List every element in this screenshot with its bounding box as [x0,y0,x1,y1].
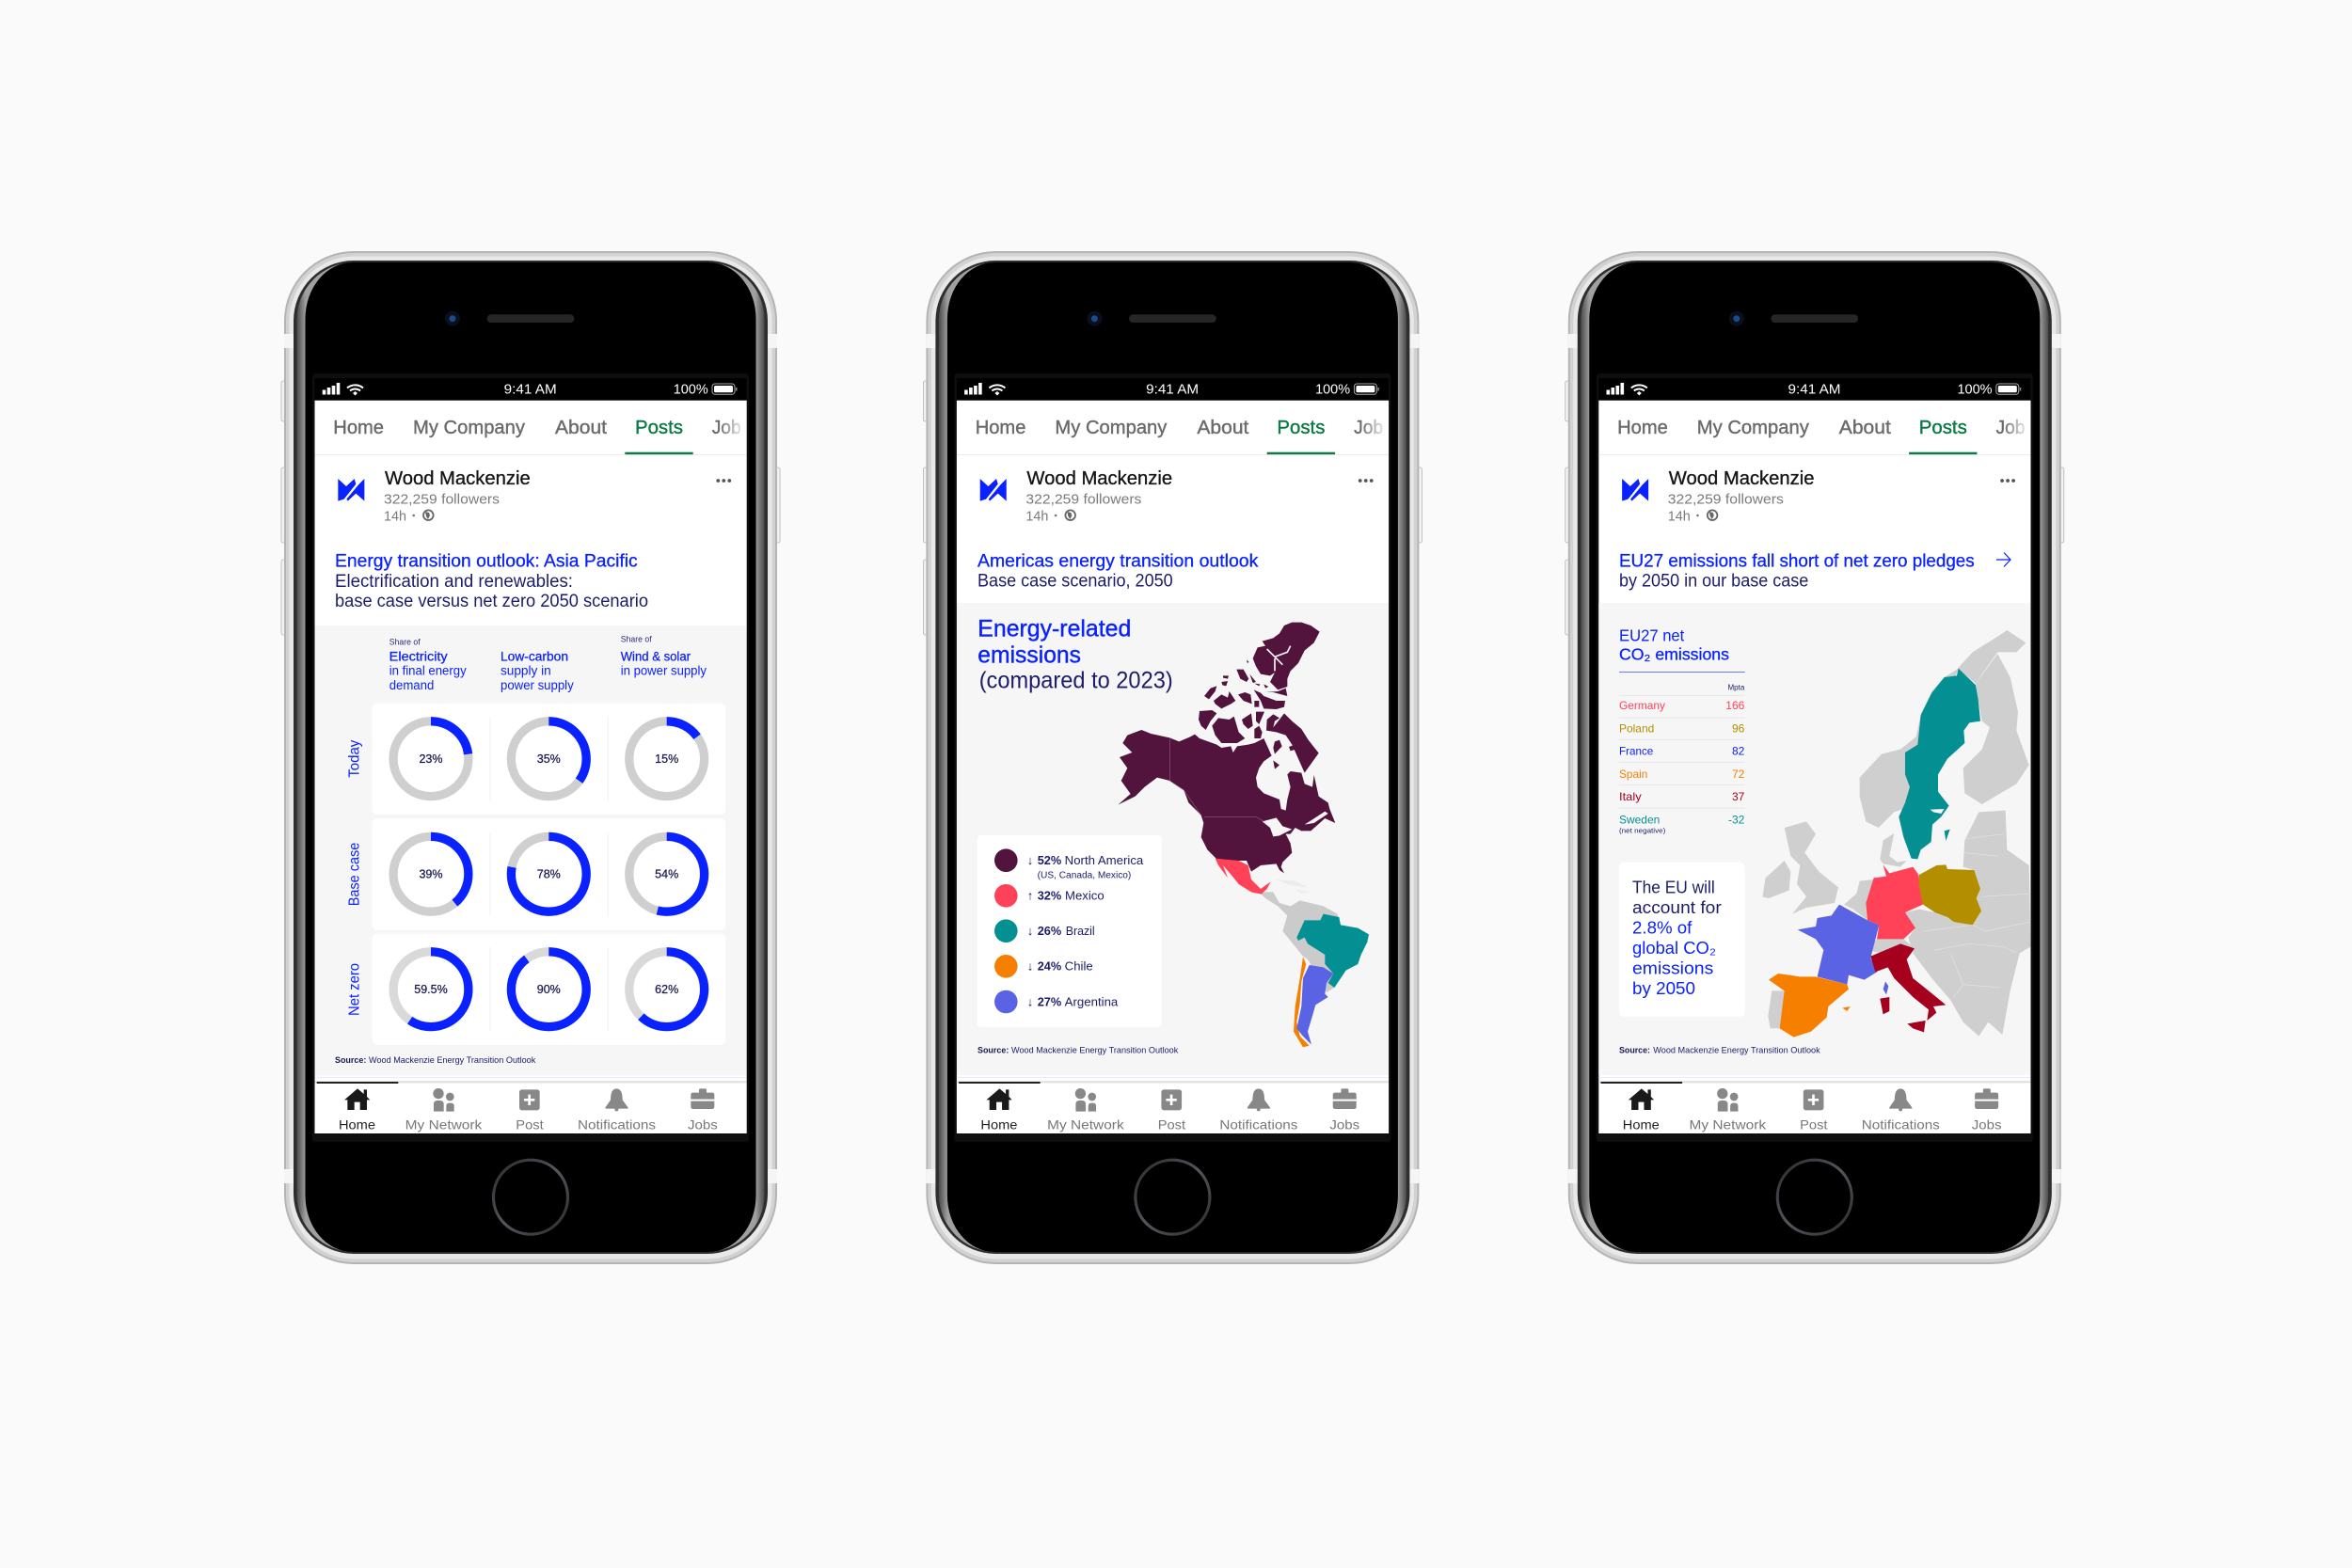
donut 62% [629,952,705,1027]
status bar text [504,382,708,397]
legend item: Argentina [994,990,1119,1013]
status bar text: 9:41 AM [504,382,557,397]
status bar text: 9:41 AM [1146,382,1199,397]
column headers: Low-carbon [501,649,568,663]
profile [384,468,531,524]
donut 90%: 90% [537,983,561,996]
Arctic archipelago [1199,623,1320,773]
row: Italy: 37 [1732,790,1745,803]
profile: 322,259 followers [384,491,500,507]
row: Italy [1619,790,1745,803]
donut 78%: 78% [537,868,561,881]
tab navigation: Home [1617,417,1668,438]
legend item: Brazil: Brazil [1066,924,1095,938]
row: Sweden: -32 [1728,813,1745,826]
region: faint Caribbean [1275,879,1311,894]
callout: global CO₂ [1632,939,1716,958]
tab navigation: Job [712,417,741,438]
profile: Wood Mackenzie [1669,468,1815,489]
source: Wood Mackenzie Energy Transition Outlook [369,1055,536,1066]
table [1619,683,1745,834]
callout: by 2050 [1632,979,1695,998]
source: Source: [335,1055,366,1066]
profile: Wood Mackenzie [1026,468,1172,489]
row: Poland [1619,721,1745,735]
row: France: 82 [1732,745,1745,758]
tab navigation: About [1839,417,1891,438]
bottom navigation labels: Notifications [1862,1117,1940,1132]
profile: 14h [1668,508,1691,524]
profile: 14h [384,508,406,524]
donut 23%: 23% [419,752,443,766]
row: Spain: 72 [1732,768,1745,781]
post heading [977,551,1259,591]
column headers: Share of [389,637,421,647]
tab navigation: Home [976,417,1025,438]
status bar text: 100% [674,382,708,397]
legend item: Brazil: ↓ [1027,924,1033,938]
legend item: North America: 52% [1038,853,1062,867]
callout: The EU will [1632,878,1715,896]
donut 59.5% [393,952,469,1027]
row cards [373,704,725,1045]
tab navigation [333,414,746,442]
bottom navigation labels [1623,1117,2002,1132]
column headers: Wind & solar [621,649,691,663]
bottom navigation labels: Post [1800,1117,1828,1132]
bottom navigation labels: Home [980,1117,1018,1132]
callout: account for [1632,898,1722,917]
legend item: Chile: Chile [1065,959,1093,974]
post heading: base case versus net zero 2050 scenario [335,592,648,611]
region: South and Central America grey [1259,892,1339,992]
legend item: North America: North America [1065,853,1144,867]
map: Americas [1118,623,1369,1047]
donut 62%: 62% [655,983,678,996]
tab navigation: Posts [1277,417,1325,438]
legend item: Chile: ↓ [1027,959,1033,974]
source: Wood Mackenzie Energy Transition Outlook [1011,1045,1179,1055]
region: Brazil [1296,914,1369,988]
donut 59.5%: 59.5% [414,983,448,996]
legend item: Argentina: 27% [1038,994,1062,1008]
region: North America [1118,623,1335,873]
status bar text: 9:41 AM [1788,382,1841,397]
legend item: Argentina: Argentina [1065,994,1119,1008]
legend item: Brazil [994,919,1095,942]
tab navigation: Home [333,417,384,438]
tab navigation: Posts [635,417,683,438]
bottom navigation labels: Home [1623,1117,1660,1132]
post heading [1619,551,1975,591]
bottom navigation labels: Jobs [1329,1117,1359,1132]
Great Lakes [1263,812,1328,836]
bottom navigation labels: My Network [1690,1117,1767,1132]
bottom navigation labels: My Network [1047,1117,1125,1132]
panel heading: emissions [977,641,1081,668]
map: Europe [1762,630,2030,1037]
tab navigation: Job [1354,417,1383,438]
profile [1025,468,1172,524]
post heading [335,551,648,611]
profile: 322,259 followers [1668,491,1784,507]
bottom navigation labels: Notifications [1219,1117,1297,1132]
region: Italy [1870,943,1946,1032]
tab navigation: My Company [413,417,526,438]
tab navigation: Job [1996,417,2026,438]
bottom navigation labels: Notifications [578,1117,656,1132]
profile: 322,259 followers [1025,491,1141,507]
region: France [1798,905,1888,994]
row: France [1619,745,1745,758]
legend item: Mexico [994,884,1104,908]
region: grey countries [1762,630,2030,1037]
phone 3: EU27 post [1565,251,2064,1264]
legend item: Mexico: Mexico [1065,889,1104,903]
tab navigation: Posts [1919,417,1967,438]
status bar text: 100% [1958,382,1993,397]
region: Mexico [1216,859,1271,895]
row: Germany [1619,699,1745,712]
legend item: Chile: 24% [1038,959,1062,974]
row labels: Today [347,740,363,778]
panel: Americas map [957,603,1389,1075]
row: Poland: Poland [1619,721,1654,735]
table: Mpta [1728,683,1745,691]
row: Germany: 166 [1725,699,1745,712]
profile: Wood Mackenzie [385,468,531,489]
panel heading [977,616,1173,694]
legend item: North America: (US, Canada, Mexico) [1038,870,1131,880]
phone 1: Asia Pacific post [281,251,780,1264]
legend item: Mexico: 32% [1038,889,1062,903]
tab navigation: About [555,417,607,438]
post heading: EU27 emissions fall short of net zero pledges [1619,551,1975,571]
status bar text [1788,382,1993,397]
tab navigation [976,414,1388,442]
donut 39% [393,836,469,911]
row: Poland: 96 [1732,721,1745,735]
donut 15% [629,721,705,797]
region: Argentina [1296,965,1333,1045]
phone 2: Americas post [923,251,1422,1264]
column headers: demand [389,678,434,692]
region: Spain [1769,974,1851,1037]
row: Spain [1619,768,1745,781]
panel: donut charts [314,626,747,1075]
profile: 14h [1025,508,1048,524]
row labels: Base case [347,843,363,906]
bottom navigation labels: Home [339,1117,375,1132]
post heading: Energy transition outlook: Asia Pacific [335,551,638,571]
donut 23% [393,721,469,797]
donut 54%: 54% [655,868,678,881]
tab navigation: About [1197,417,1249,438]
column headers: in final energy [389,663,467,677]
source: Source: [977,1045,1009,1055]
tab navigation [1617,414,2030,442]
status bar text: 100% [1315,382,1350,397]
source: Wood Mackenzie Energy Transition Outlook [1653,1045,1820,1055]
legend item: Brazil: 26% [1038,924,1062,938]
panel heading: EU27 net [1619,626,1684,645]
column headers: supply in [501,663,551,677]
row labels [347,740,363,1016]
panel heading: Energy-related [977,616,1131,642]
legend item: Argentina: ↓ [1027,994,1033,1008]
region: Germany [1866,864,1923,939]
column headers: Share of [621,634,652,644]
source: Source: [1619,1045,1650,1055]
column headers [389,634,707,692]
post heading: Base case scenario, 2050 [977,571,1173,591]
status bar text [1146,382,1350,397]
region: Poland [1918,864,1981,925]
row: Sweden: (net negative) [1619,826,1666,834]
column headers: in power supply [621,663,707,677]
donut 35% [511,721,586,797]
legend item: Chile [994,955,1093,978]
profile [1668,468,1814,524]
legend [977,835,1162,1027]
legend item: Mexico: ↑ [1027,889,1033,903]
bottom navigation labels [980,1117,1359,1132]
bottom navigation labels: Jobs [688,1117,718,1132]
row labels: Net zero [347,963,363,1016]
panel: EU map [1598,603,2030,1075]
donut 35%: 35% [537,752,561,766]
post heading: by 2050 in our base case [1619,571,1808,591]
panel heading [1619,626,1745,673]
row: Germany: Germany [1619,699,1665,712]
region: Sweden [1899,669,1980,859]
donut 90% [511,952,586,1027]
callout: 2.8% of [1632,918,1692,937]
bottom navigation labels [339,1117,718,1132]
legend item: North America: ↓ [1027,853,1033,867]
donut 54% [629,836,705,911]
bottom navigation labels: My Network [405,1117,483,1132]
row: Sweden [1619,813,1745,834]
panel heading: CO₂ emissions [1619,645,1729,664]
column headers: power supply [501,678,574,692]
bottom navigation labels: Post [516,1117,544,1132]
donut 78% [511,836,586,911]
icon: arrow [1996,553,2010,566]
panel heading: (compared to 2023) [979,668,1173,694]
column headers: Electricity [389,649,448,663]
tab navigation: My Company [1055,417,1168,438]
row: Italy: Italy [1619,790,1642,803]
tab navigation: My Company [1697,417,1810,438]
callout: emissions [1632,958,1713,977]
legend item: North America [994,848,1144,880]
donut 15%: 15% [655,752,678,766]
callout [1619,863,1745,1017]
row: France: France [1619,745,1654,758]
row: Spain: Spain [1619,768,1647,781]
post heading: Electrification and renewables: [335,572,573,592]
row: Sweden: Sweden [1619,813,1660,826]
donut 39%: 39% [419,868,443,881]
region: Chile [1294,957,1310,1047]
bottom navigation labels: Post [1158,1117,1185,1132]
post heading: Americas energy transition outlook [977,551,1259,571]
bottom navigation labels: Jobs [1972,1117,2002,1132]
